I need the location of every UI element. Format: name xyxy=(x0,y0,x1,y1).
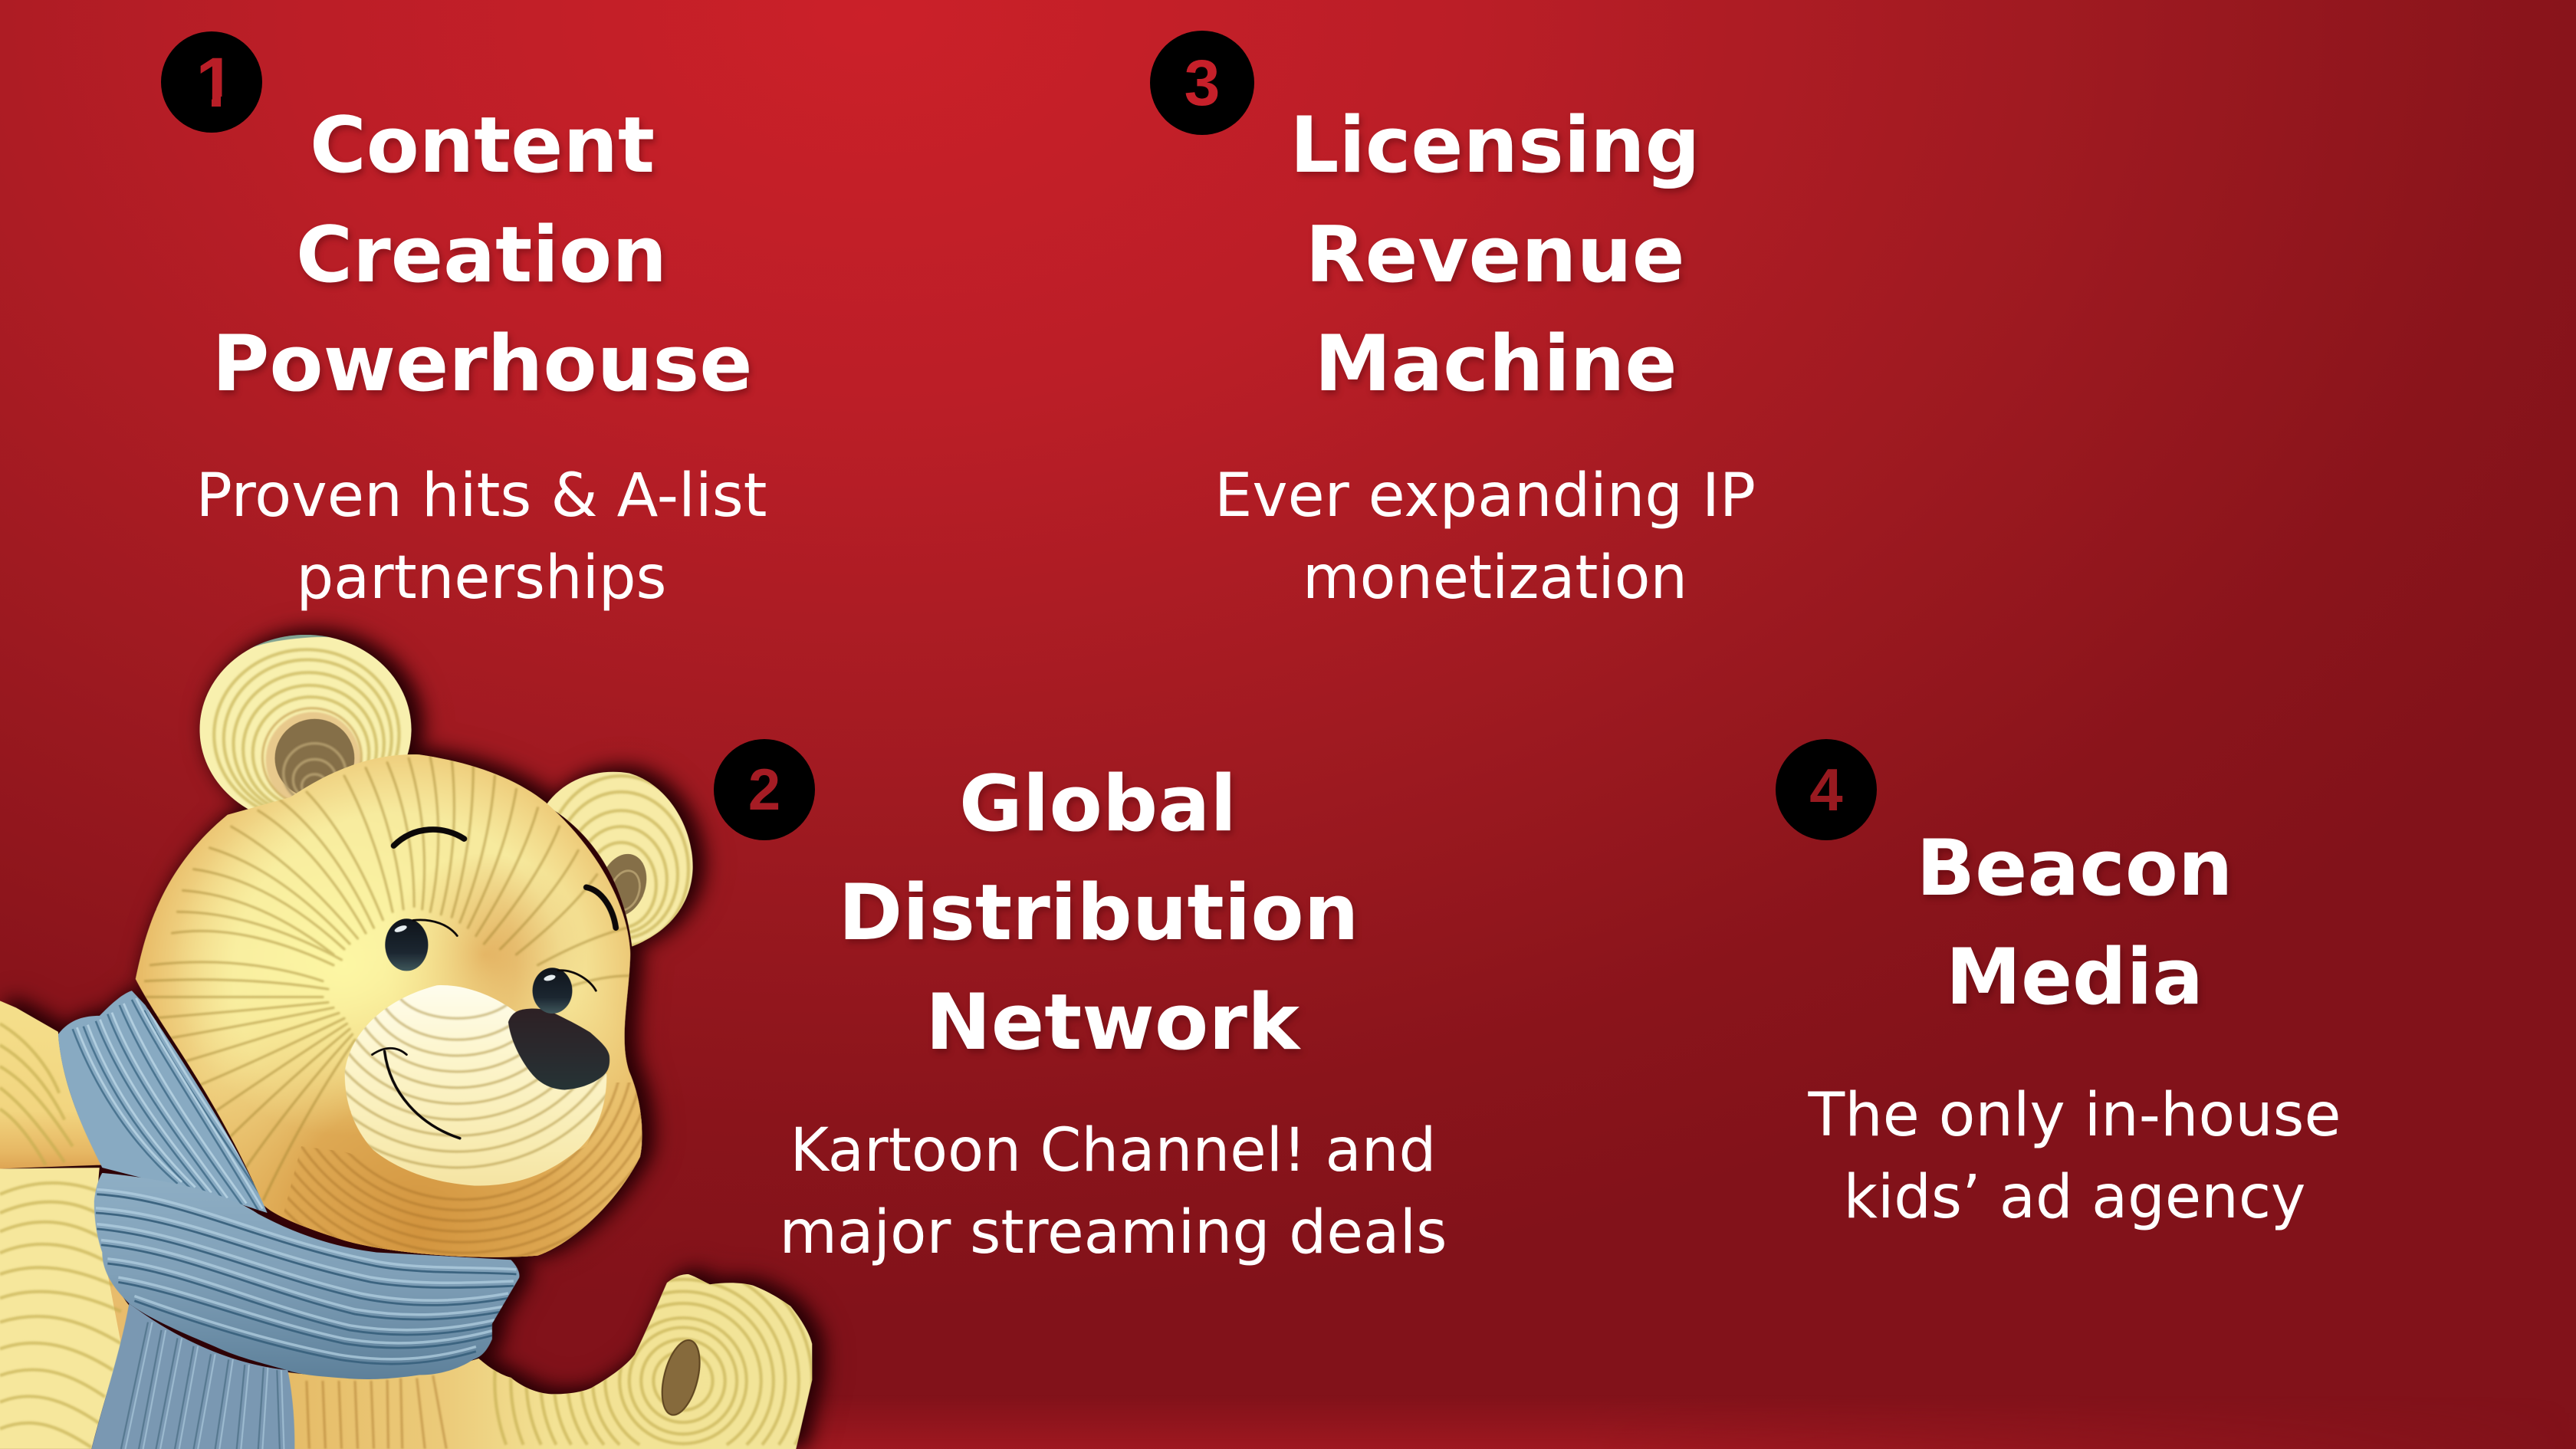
right eye xyxy=(533,968,572,1014)
heading 2: Network xyxy=(925,977,1302,1067)
body 4 xyxy=(1807,1081,2341,1232)
left eye xyxy=(385,918,428,971)
heading 1: Creation xyxy=(296,209,667,300)
muzzle xyxy=(345,985,607,1186)
body 3: monetization xyxy=(1303,544,1687,613)
item 2: global distribution network xyxy=(714,739,1447,1267)
heading 1: Content xyxy=(310,100,655,190)
heading 1 xyxy=(212,100,753,409)
bear body xyxy=(0,1165,140,1449)
body 2: Kartoon Channel! and xyxy=(790,1116,1437,1185)
body 4: The only in-house xyxy=(1807,1081,2341,1150)
badge 1 xyxy=(161,31,262,133)
scarf upper band xyxy=(54,987,274,1221)
heading 4 xyxy=(1917,823,2233,1022)
scarf knot band xyxy=(91,1165,527,1383)
heading 4: Media xyxy=(1946,932,2203,1022)
badge 2 xyxy=(714,739,815,840)
badge 2: 2 xyxy=(748,757,780,823)
item 1: content creation powerhouse xyxy=(161,31,767,613)
heading 2: Global xyxy=(959,758,1237,849)
heading 4: Beacon xyxy=(1917,823,2233,913)
item 4: beacon media xyxy=(1776,739,2341,1232)
badge 3: 3 xyxy=(1184,47,1220,119)
heading 3: Machine xyxy=(1314,318,1677,409)
heading 3: Revenue xyxy=(1305,209,1685,300)
heading 1: Powerhouse xyxy=(212,318,753,409)
nose xyxy=(508,1009,610,1089)
body 4: kids’ ad agency xyxy=(1843,1163,2306,1232)
heading 2: Distribution xyxy=(839,867,1359,958)
body 2: major streaming deals xyxy=(779,1198,1447,1267)
badge 4: 4 xyxy=(1809,756,1843,823)
body 1: partnerships xyxy=(296,544,667,613)
body 2 xyxy=(779,1116,1447,1267)
bear left arm xyxy=(0,997,107,1173)
heading 3: Licensing xyxy=(1290,100,1700,190)
badge 4 xyxy=(1776,739,1877,840)
scarf tail xyxy=(86,1301,301,1449)
left ear xyxy=(199,635,412,824)
body 1 xyxy=(196,462,767,613)
heading 3 xyxy=(1290,100,1700,409)
paw pad xyxy=(656,1336,706,1419)
body 3: Ever expanding IP xyxy=(1214,462,1756,531)
right ear xyxy=(538,763,699,951)
illustration: yellow yarn teddy bear with blue scarf xyxy=(0,635,826,1449)
body 3 xyxy=(1214,462,1756,613)
fur fan xyxy=(143,757,629,1200)
item 3: licensing revenue machine xyxy=(1150,31,1756,613)
body 1: Proven hits & A-list xyxy=(196,462,767,531)
badge 1: 1 xyxy=(196,44,235,122)
brows and smile xyxy=(372,830,616,1138)
heading 2 xyxy=(839,758,1359,1067)
bear right arm and paw xyxy=(285,1194,826,1449)
head xyxy=(129,736,669,1270)
badge 3 xyxy=(1150,31,1254,135)
